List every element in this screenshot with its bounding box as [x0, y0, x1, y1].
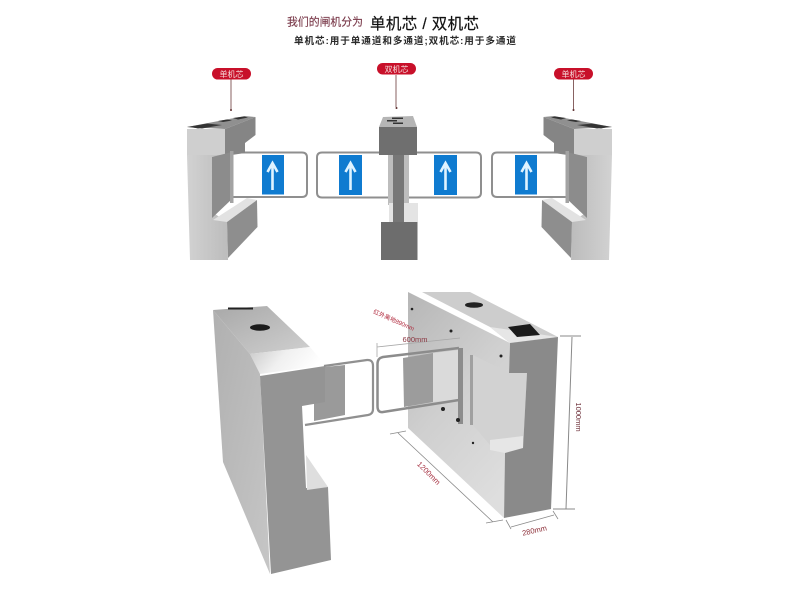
dimension: 1000mm height: 1000mm: [574, 402, 583, 432]
callout: left single core: 单机芯: [220, 69, 244, 79]
top face: [213, 306, 310, 354]
title lead-in: 我们的闸机分为: [287, 14, 363, 28]
panel: large gate, left cabinet: [213, 306, 373, 574]
panel: centre double-core gate: [317, 116, 481, 260]
title: [287, 14, 479, 33]
callout: centre double core: [377, 63, 416, 109]
dimension: infrared sensor height: 红外离地890mm: [372, 308, 416, 333]
callout: left single core: [212, 68, 251, 111]
icon: gate arm: [232, 152, 307, 197]
dimension: 1000mm height: [553, 336, 583, 509]
icon: dark slot panel: [403, 353, 433, 407]
callout: right single core: [554, 68, 593, 111]
dimension: 280mm depth: 280mm: [521, 523, 548, 538]
icon: swing arm: [305, 360, 373, 425]
icon: reader hole: [250, 324, 270, 331]
dimension: 280mm depth: [506, 511, 558, 538]
icon: left gate arm: [317, 152, 389, 198]
dimension: 600mm opening: 600mm: [402, 335, 428, 344]
icon: reader hole: [465, 302, 483, 308]
icon: right gate arm: [408, 152, 481, 198]
callout: right single core: 单机芯: [562, 69, 586, 79]
dimension: 1200mm length: 1200mm: [415, 460, 442, 487]
callout: centre double core: 双机芯: [384, 64, 408, 74]
icon: swing arm: [378, 348, 459, 412]
title emphasis: 单机芯 / 双机芯: [370, 15, 479, 33]
dimension: 1200mm length: [390, 431, 503, 523]
subtitle: 单机芯:用于单通道和多通道;双机芯:用于多通道: [294, 35, 516, 47]
icon: card reader: [508, 324, 540, 337]
dimension: 600mm opening: [377, 335, 460, 357]
panel: right single-core gate: [492, 116, 612, 260]
panel: left single-core gate: [187, 116, 307, 260]
panel: large gate, right cabinet: [378, 292, 558, 518]
